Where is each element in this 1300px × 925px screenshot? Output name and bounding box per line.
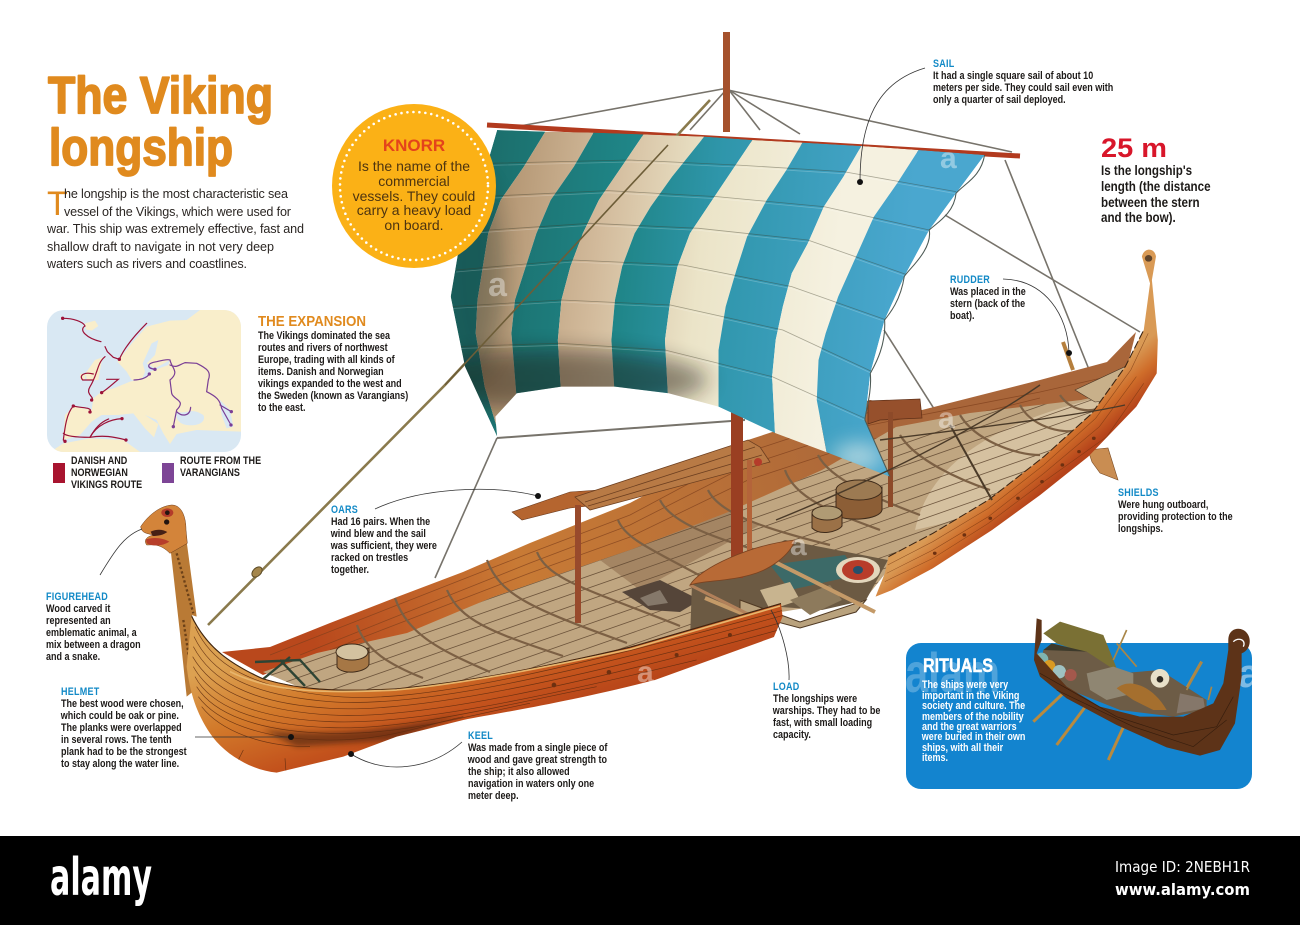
fore rope over sail (445, 145, 668, 385)
legend: map routes: NORWEGIAN (71, 467, 128, 479)
label: keel: navigation in waters only one (468, 778, 595, 790)
label: keel (467, 730, 608, 802)
map panel: expansion routes (43, 307, 243, 457)
label: rudder: boat). (950, 310, 975, 322)
stat: 25 m: length (the distance (1101, 179, 1211, 194)
label: oars: racked on trestles (331, 552, 408, 564)
intro text: vessel of the Vikings, which were used for (64, 205, 291, 219)
text block: the expansion: to the east. (258, 402, 306, 414)
text block: the expansion: items. Danish and Norwegian (258, 366, 384, 378)
knorr circle: carry a heavy load (357, 202, 471, 218)
label: figurehead: Wood carved it (46, 603, 111, 615)
rudder blade (1088, 448, 1118, 480)
text block: the expansion: The Vikings dominated the sea (258, 330, 390, 342)
label: rudder: Was placed in the (950, 286, 1026, 298)
footer bar (0, 836, 1300, 925)
burial ship illustration (1033, 618, 1250, 760)
label: sail: SAIL (933, 58, 955, 70)
panel: rituals: ships, with all their (922, 742, 1003, 754)
footer bar: alamy (50, 848, 152, 908)
watermarks: a (637, 656, 654, 689)
sail seams (451, 160, 956, 418)
watermarks: a (488, 266, 508, 304)
title: longship (49, 119, 233, 177)
footer bar: Image ID: 2NEBH1R (1115, 858, 1250, 876)
panel: rituals: were buried in their own (921, 731, 1025, 743)
label: figurehead (46, 591, 141, 663)
panel: rituals (905, 641, 1261, 789)
rigging behind sail (435, 88, 1140, 578)
panel: rituals: alam (905, 641, 1000, 704)
label: sail: only a quarter of sail deployed. (933, 94, 1066, 106)
tackle in bow (255, 657, 320, 686)
knorr circle (332, 104, 496, 268)
mast partner (690, 540, 795, 585)
label: keel: wood and gave great strength to (467, 754, 607, 766)
bow hull and figurehead (141, 505, 797, 773)
panel: rituals: RITUALS (923, 656, 993, 677)
far hull wall (222, 332, 1136, 675)
label: keel: the ship; it also allowed (468, 766, 570, 778)
title: The Viking (48, 67, 273, 125)
intro text: T (47, 185, 68, 223)
label: sail (933, 58, 1113, 106)
label: helmet: which could be oak or pine. (60, 710, 179, 722)
watermarks: a (940, 142, 957, 175)
panel: rituals: society and culture. The (922, 700, 1026, 712)
label: shields: Were hung outboard, (1118, 499, 1209, 511)
label: sail: It had a single square sail of about 10 (933, 70, 1094, 82)
intro text: war. This ship was extremely effective, fast and (46, 222, 304, 236)
label: sail: meters per side. They could sail even with (933, 82, 1113, 94)
label: load: warships. They had to be (772, 705, 881, 717)
watermarks (488, 142, 957, 689)
sail (408, 130, 985, 477)
label: load: LOAD (773, 681, 800, 693)
label: helmet: in several rows. The tenth (61, 734, 172, 746)
deck floor (263, 398, 1100, 690)
intro text: shallow draft to navigate in not very deep (47, 240, 274, 254)
label: helmet: The planks were overlapped (61, 722, 182, 734)
label: figurehead: mix between a dragon (46, 639, 141, 651)
panel: rituals: items. (922, 752, 948, 764)
hold with cargo (622, 540, 888, 640)
label: rudder: RUDDER (950, 274, 990, 286)
label: load: fast, with small loading (773, 717, 872, 729)
panel: rituals: and the great warriors (922, 721, 1017, 733)
barrels (336, 480, 882, 672)
rudder post (1063, 342, 1073, 370)
rear hull (876, 250, 1158, 597)
legend: map routes: VARANGIANS (180, 467, 240, 479)
lower mast (731, 400, 762, 578)
text block: the expansion (258, 313, 408, 414)
panel: rituals: important in the Viking (922, 690, 1019, 702)
stat: 25 m: and the bow). (1101, 210, 1176, 225)
ship illustration (140, 32, 1158, 773)
label: shields: longships. (1118, 523, 1163, 535)
sail shading (408, 350, 708, 410)
label: oars: OARS (331, 504, 358, 516)
label: keel: meter deep. (468, 790, 519, 802)
front oar rack (512, 399, 922, 623)
label: keel: Was made from a single piece of (468, 742, 608, 754)
label: helmet: HELMET (61, 686, 100, 698)
label: oars: wind blew and the sail (330, 528, 426, 540)
label: keel: KEEL (468, 730, 493, 742)
label: figurehead: represented an (46, 615, 111, 627)
knorr circle: commercial (378, 173, 450, 189)
panel: rituals: The ships were very (922, 679, 1008, 691)
label: helmet (60, 686, 187, 770)
label: rudder (950, 274, 1026, 322)
yard (487, 125, 1020, 156)
footer bar: www.alamy.com (1115, 880, 1250, 899)
legend: map routes: ROUTE FROM THE (180, 455, 261, 467)
watermarks: a (938, 402, 955, 435)
label: oars: together. (331, 564, 369, 576)
knorr circle: Is the name of the (358, 158, 470, 174)
stat: 25 m: Is the longship's (1101, 163, 1192, 178)
panel: rituals: members of the nobility (922, 711, 1024, 723)
text block: the expansion: Europe, trading with all kinds of (258, 354, 395, 366)
text block: the expansion: routes and rivers of northwest (258, 342, 388, 354)
legend: map routes: VIKINGS ROUTE (71, 479, 142, 491)
legend: map routes: DANISH AND (71, 455, 127, 467)
intro text: waters such as rivers and coastlines. (46, 257, 247, 271)
ribs (357, 395, 1105, 678)
label: oars: Had 16 pairs. When the (331, 516, 430, 528)
label: load: The longships were (773, 693, 857, 705)
label: shields: SHIELDS (1118, 487, 1159, 499)
knorr circle: KNORR (383, 136, 445, 155)
legend: map routes (53, 455, 261, 491)
label: helmet: plank had to be the strongest (61, 746, 187, 758)
callout lines (100, 68, 1069, 767)
near hull (187, 603, 783, 773)
label: helmet: to stay along the water line. (61, 758, 179, 770)
text block: the expansion: THE EXPANSION (258, 313, 366, 330)
label: figurehead: and a snake. (46, 651, 100, 663)
label: helmet: The best wood were chosen, (61, 698, 184, 710)
label: shields (1118, 487, 1233, 535)
text block: the expansion: vikings expanded to the west and (258, 378, 402, 390)
intro text: he longship is the most characteristic sea (64, 187, 288, 201)
label: rudder: stern (back of the (950, 298, 1025, 310)
label: oars (330, 504, 437, 576)
intro text (46, 185, 304, 271)
upper mast (723, 32, 730, 132)
figurehead (141, 505, 187, 553)
label: shields: providing protection to the (1118, 511, 1233, 523)
stat: 25 m: between the stern (1101, 195, 1200, 210)
callout dots (288, 179, 1072, 757)
stat: 25 m (1101, 133, 1211, 225)
label: load: capacity. (773, 729, 811, 741)
stat: 25 m: 25 m (1101, 133, 1167, 163)
watermarks: a (790, 529, 807, 562)
label: load (772, 681, 881, 741)
label: figurehead: emblematic animal, a (46, 627, 137, 639)
label: oars: was sufficient, they were (330, 540, 437, 552)
far wall planks (270, 375, 1115, 655)
text block: the expansion: the Sweden (known as Varangians) (258, 390, 408, 402)
shield in hold (836, 557, 880, 583)
label: figurehead: FIGUREHEAD (46, 591, 108, 603)
long fore rope (208, 100, 710, 625)
rear hull ropes (776, 385, 1125, 520)
title (48, 67, 273, 177)
knorr circle: on board. (384, 217, 444, 233)
stem post (171, 537, 197, 697)
stern deck (1075, 362, 1135, 402)
panel: rituals: a (1238, 652, 1261, 696)
sail stripes (451, 130, 985, 477)
knorr circle: vessels. They could (353, 188, 475, 204)
